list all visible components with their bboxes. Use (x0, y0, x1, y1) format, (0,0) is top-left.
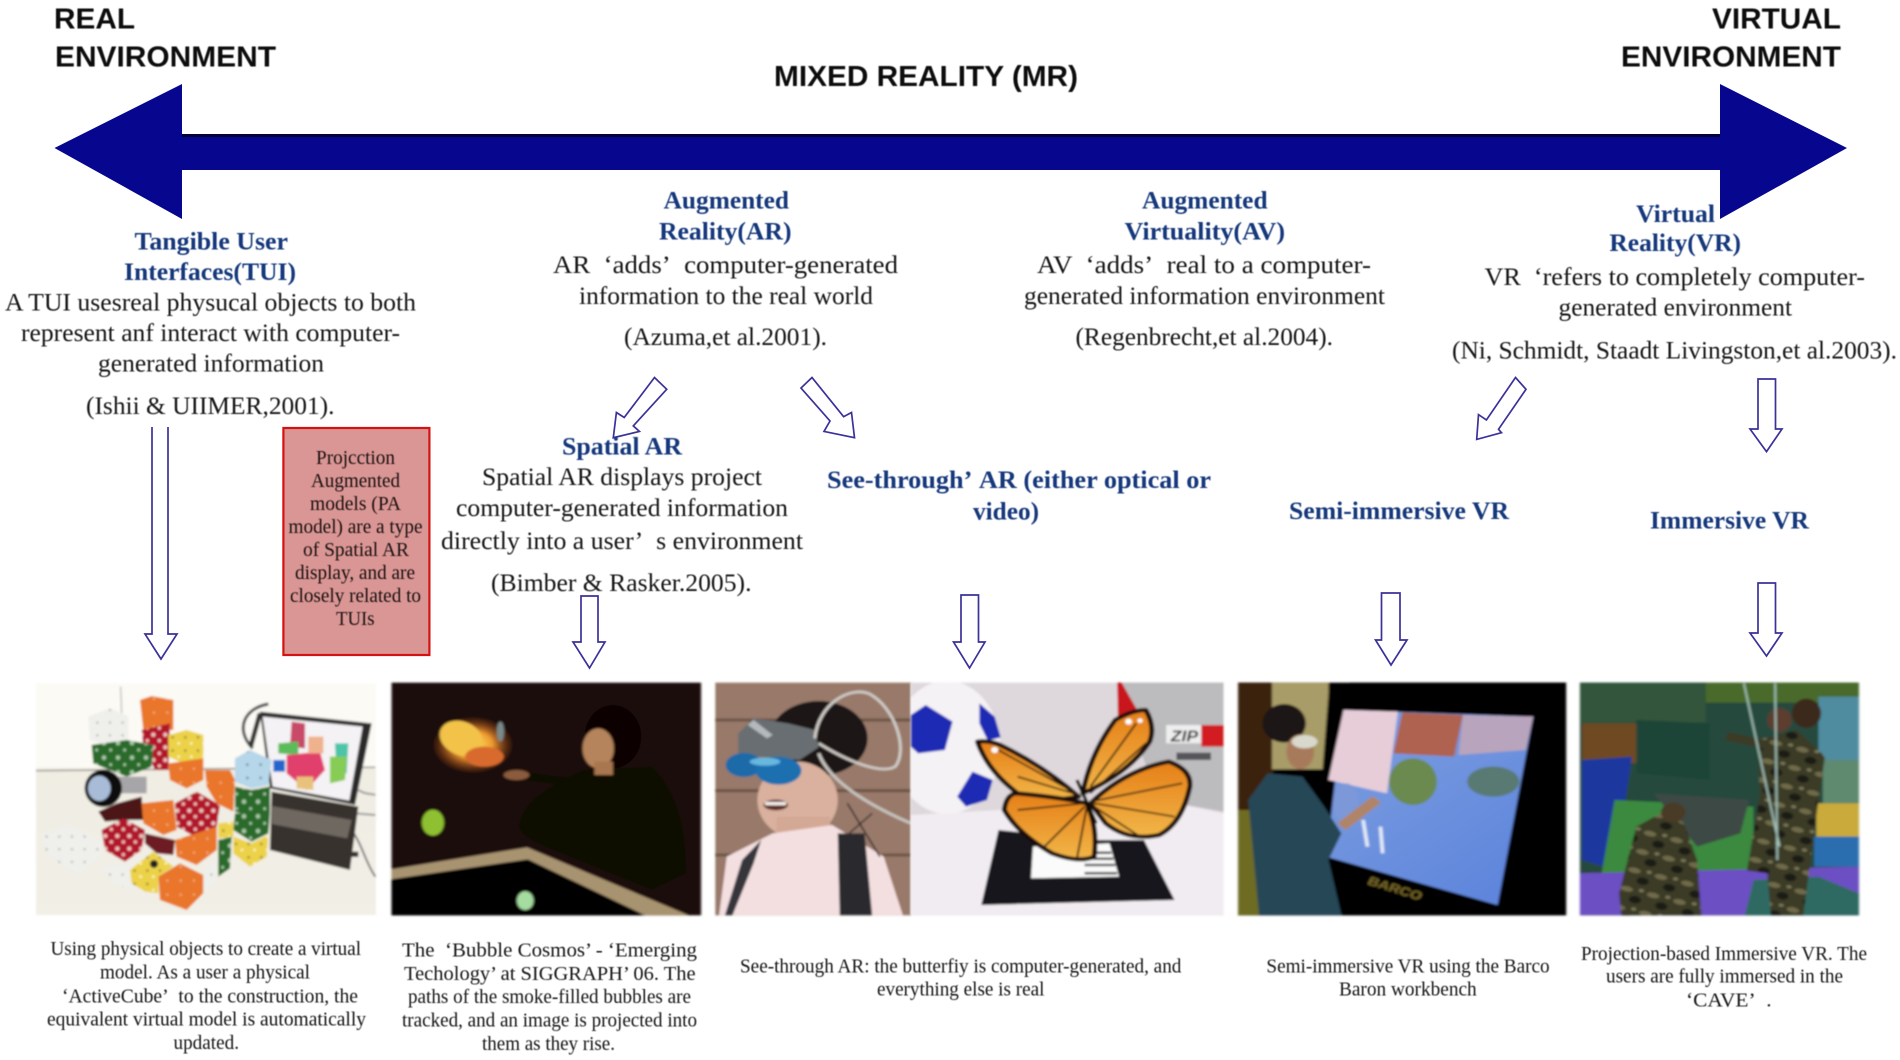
heading: semi-immersive VR: Semi-immersive VR (1289, 496, 1510, 525)
arrow: VR to semi-immersive (1477, 378, 1526, 439)
caption: immersive VR: Projection-based Immersive VR. The (1581, 943, 1867, 965)
callout: projection augmented models: closely related to (290, 585, 421, 607)
caption: immersive VR: ‘CAVE’ . (1686, 990, 1772, 1012)
text block: augmented reality: (Azuma,et al.2001). (624, 322, 827, 351)
caption: semi-immersive VR (1266, 955, 1550, 1001)
photo: bubble cosmos (392, 683, 701, 915)
arrow: spatial AR down (573, 596, 605, 668)
heading: virtual environment: ENVIRONMENT (1621, 42, 1841, 74)
text block: augmented virtuality (1024, 185, 1385, 351)
text block: augmented reality: Reality(AR) (659, 216, 792, 246)
heading: virtual environment: VIRTUAL (1712, 4, 1841, 36)
photo: semi-immersive Barco Baron workbench (1238, 683, 1566, 915)
caption: semi-immersive VR: Semi-immersive VR using the Barco (1266, 955, 1550, 977)
arrow: AR to spatial AR (613, 378, 667, 438)
heading: real environment: REAL (54, 4, 135, 36)
text block: tangible user interfaces: A TUI usesreal physucal objects to both (5, 288, 416, 317)
caption: immersive VR: users are fully immersed in the (1606, 966, 1843, 988)
photo: AR butterfly on marker: ZIP (1170, 729, 1199, 745)
text block: spatial AR: (Bimber & Rasker.2005). (491, 568, 752, 597)
text block: tangible user interfaces (5, 227, 416, 420)
text block: tangible user interfaces: generated information (98, 349, 324, 378)
text block: virtual reality: VR ‘refers to completely computer- (1484, 262, 1865, 291)
text block: virtual reality: generated environment (1558, 293, 1792, 322)
heading: see-through AR (827, 465, 1211, 526)
text block: augmented reality (553, 185, 898, 351)
caption: immersive VR (1581, 943, 1867, 1012)
text block: virtual reality: (Ni, Schmidt, Staadt Livingston,et al.2003). (1452, 336, 1897, 365)
caption: bubble cosmos: The ‘Bubble Cosmos’ - ‘Emerging (402, 940, 697, 962)
text block: augmented virtuality: Virtuality(AV) (1124, 216, 1285, 246)
caption: bubble cosmos: tracked, and an image is projected into (402, 1010, 697, 1032)
heading: real environment (54, 4, 276, 74)
text block: tangible user interfaces: represent anf interact with computer- (21, 318, 400, 347)
callout: projection augmented models: Augmented (311, 470, 400, 492)
arrow: immersive down (1750, 583, 1782, 656)
caption: see-through AR: everything else is real (877, 979, 1045, 1001)
heading: see-through AR: See-through’ AR (either optical or (827, 465, 1211, 494)
caption: active cube: equivalent virtual model is automatically (47, 1009, 367, 1031)
caption: see-through AR (740, 955, 1181, 1001)
text block: tangible user interfaces: (Ishii & UIIMER,2001). (86, 391, 334, 420)
caption: active cube (47, 938, 367, 1054)
text block: tangible user interfaces: Tangible User (134, 227, 288, 256)
callout: projection augmented models: TUIs (336, 608, 375, 630)
text block: augmented virtuality: AV ‘adds’ real to a computer- (1037, 250, 1371, 279)
callout: projection augmented models (283, 428, 429, 655)
caption: bubble cosmos: paths of the smoke-filled bubbles are (408, 986, 691, 1008)
heading: virtual environment (1621, 4, 1841, 74)
caption: see-through AR: See-through AR: the butterfiy is computer-generated, and (740, 955, 1181, 977)
text block: augmented virtuality: (Regenbrecht,et al.2004). (1076, 322, 1333, 351)
caption: semi-immersive VR: Baron workbench (1339, 979, 1477, 1001)
text block: spatial AR: computer-generated information (456, 493, 788, 522)
callout: projection augmented models: model) are a type (288, 516, 423, 538)
text block: virtual reality: Virtual (1636, 199, 1715, 228)
caption: bubble cosmos: them as they rise. (482, 1033, 615, 1055)
text block: tangible user interfaces: Interfaces(TUI) (124, 257, 296, 286)
heading: mixed reality: MIXED REALITY (MR) (774, 61, 1078, 93)
text block: spatial AR: Spatial AR (562, 432, 683, 460)
callout: projection augmented models: models (PA (310, 493, 402, 515)
heading: see-through AR: video) (973, 496, 1039, 526)
callout: projection augmented models: Projcction (316, 447, 395, 469)
arrow: semi-immersive down (1376, 593, 1407, 665)
arrow: see-through AR down (954, 595, 985, 668)
text block: augmented reality: Augmented (664, 185, 789, 214)
caption: active cube: Using physical objects to create a virtual (50, 938, 361, 960)
text block: virtual reality (1452, 199, 1897, 365)
photo: immersive CAVE (1580, 683, 1859, 915)
photo: person wearing head-mounted display (715, 683, 911, 915)
continuum arrow (54, 84, 1847, 219)
caption: bubble cosmos (402, 940, 697, 1055)
photo: semi-immersive Barco Baron workbench: BARCO (1365, 874, 1425, 903)
callout: projection augmented models: of Spatial AR (303, 539, 410, 561)
text block: augmented reality: AR ‘adds’ computer-generated (553, 250, 898, 279)
heading: real environment: ENVIRONMENT (55, 42, 276, 74)
text block: virtual reality: Reality(VR) (1609, 228, 1741, 257)
caption: active cube: ‘ActiveCube’ to the construction, the (62, 985, 358, 1007)
text block: augmented virtuality: Augmented (1142, 185, 1268, 214)
callout: projection augmented models: display, and are (295, 562, 415, 584)
caption: bubble cosmos: Techology’ at SIGGRAPH’ 06. The (404, 963, 696, 985)
photo: tangible cubes and laptop (36, 683, 376, 915)
heading: immersive VR: Immersive VR (1650, 506, 1810, 535)
arrow: AR to see-through AR (801, 378, 854, 438)
photo: AR butterfly on marker (893, 681, 1224, 915)
text block: spatial AR: directly into a user’ s environment (441, 526, 803, 555)
caption: active cube: model. As a user a physical (100, 961, 310, 983)
text block: spatial AR: Spatial AR displays project (482, 462, 762, 491)
arrow: TUI down (145, 427, 177, 659)
text block: augmented virtuality: generated information environment (1024, 281, 1385, 310)
caption: active cube: updated. (174, 1032, 239, 1054)
arrow: VR to immersive (1750, 379, 1782, 452)
text block: augmented reality: information to the real world (579, 281, 873, 310)
text block: spatial AR (441, 432, 803, 597)
